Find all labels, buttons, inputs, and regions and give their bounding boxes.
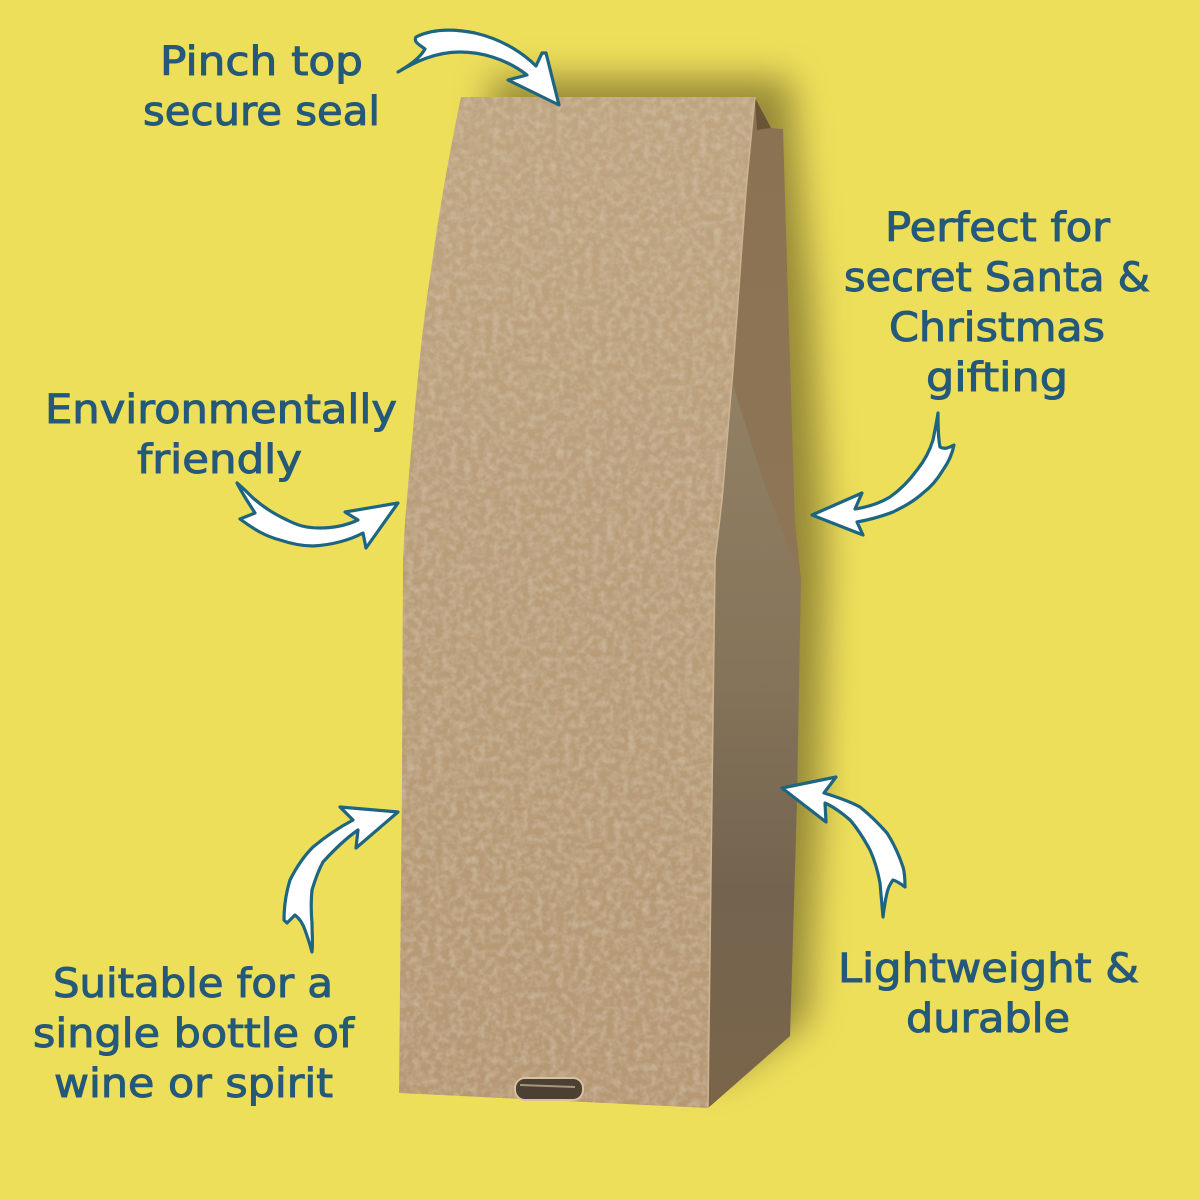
- box front edge highlight: [708, 97, 755, 1108]
- arrow: christmas gifting: [812, 413, 954, 535]
- box shadow: [490, 78, 826, 1080]
- arrow: pinch top: [398, 30, 559, 105]
- text: perfect for secret santa and christmas gifting: gifting: [926, 355, 1068, 401]
- text: perfect for secret santa and christmas gifting: Christmas: [889, 305, 1105, 351]
- arrow: environmentally friendly: [237, 483, 398, 548]
- box carry slot: [514, 1077, 584, 1101]
- product: kraft bottle box: [399, 97, 801, 1108]
- text: pinch top secure seal: Pinch top: [160, 39, 363, 85]
- box top fold shadow: [755, 98, 771, 130]
- text: lightweight and durable: [838, 946, 1139, 1042]
- text: environmentally friendly: Environmentally: [45, 387, 397, 433]
- text: perfect for secret santa and christmas gifting: secret Santa &: [844, 255, 1150, 301]
- box side lower panel: [708, 385, 800, 1108]
- text: lightweight and durable: durable: [906, 996, 1070, 1042]
- text: suitable for a single bottle: wine or spirit: [54, 1061, 333, 1107]
- text: pinch top secure seal: secure seal: [143, 89, 380, 135]
- arrow: single bottle: [284, 807, 398, 952]
- box side panel: [708, 98, 801, 1108]
- text: environmentally friendly: friendly: [137, 437, 302, 483]
- box front panel: [399, 97, 755, 1108]
- text: perfect for secret santa and christmas gifting: Perfect for: [885, 205, 1111, 251]
- arrow: lightweight and durable: [782, 777, 905, 917]
- text: perfect for secret santa and christmas gifting: [844, 205, 1150, 401]
- text: suitable for a single bottle: single bottle of: [33, 1011, 355, 1057]
- text: lightweight and durable: Lightweight &: [838, 946, 1139, 992]
- text: environmentally friendly: [45, 387, 397, 483]
- text: pinch top secure seal: [143, 39, 380, 135]
- text: suitable for a single bottle: [33, 961, 355, 1107]
- text: suitable for a single bottle: Suitable for a: [53, 961, 333, 1007]
